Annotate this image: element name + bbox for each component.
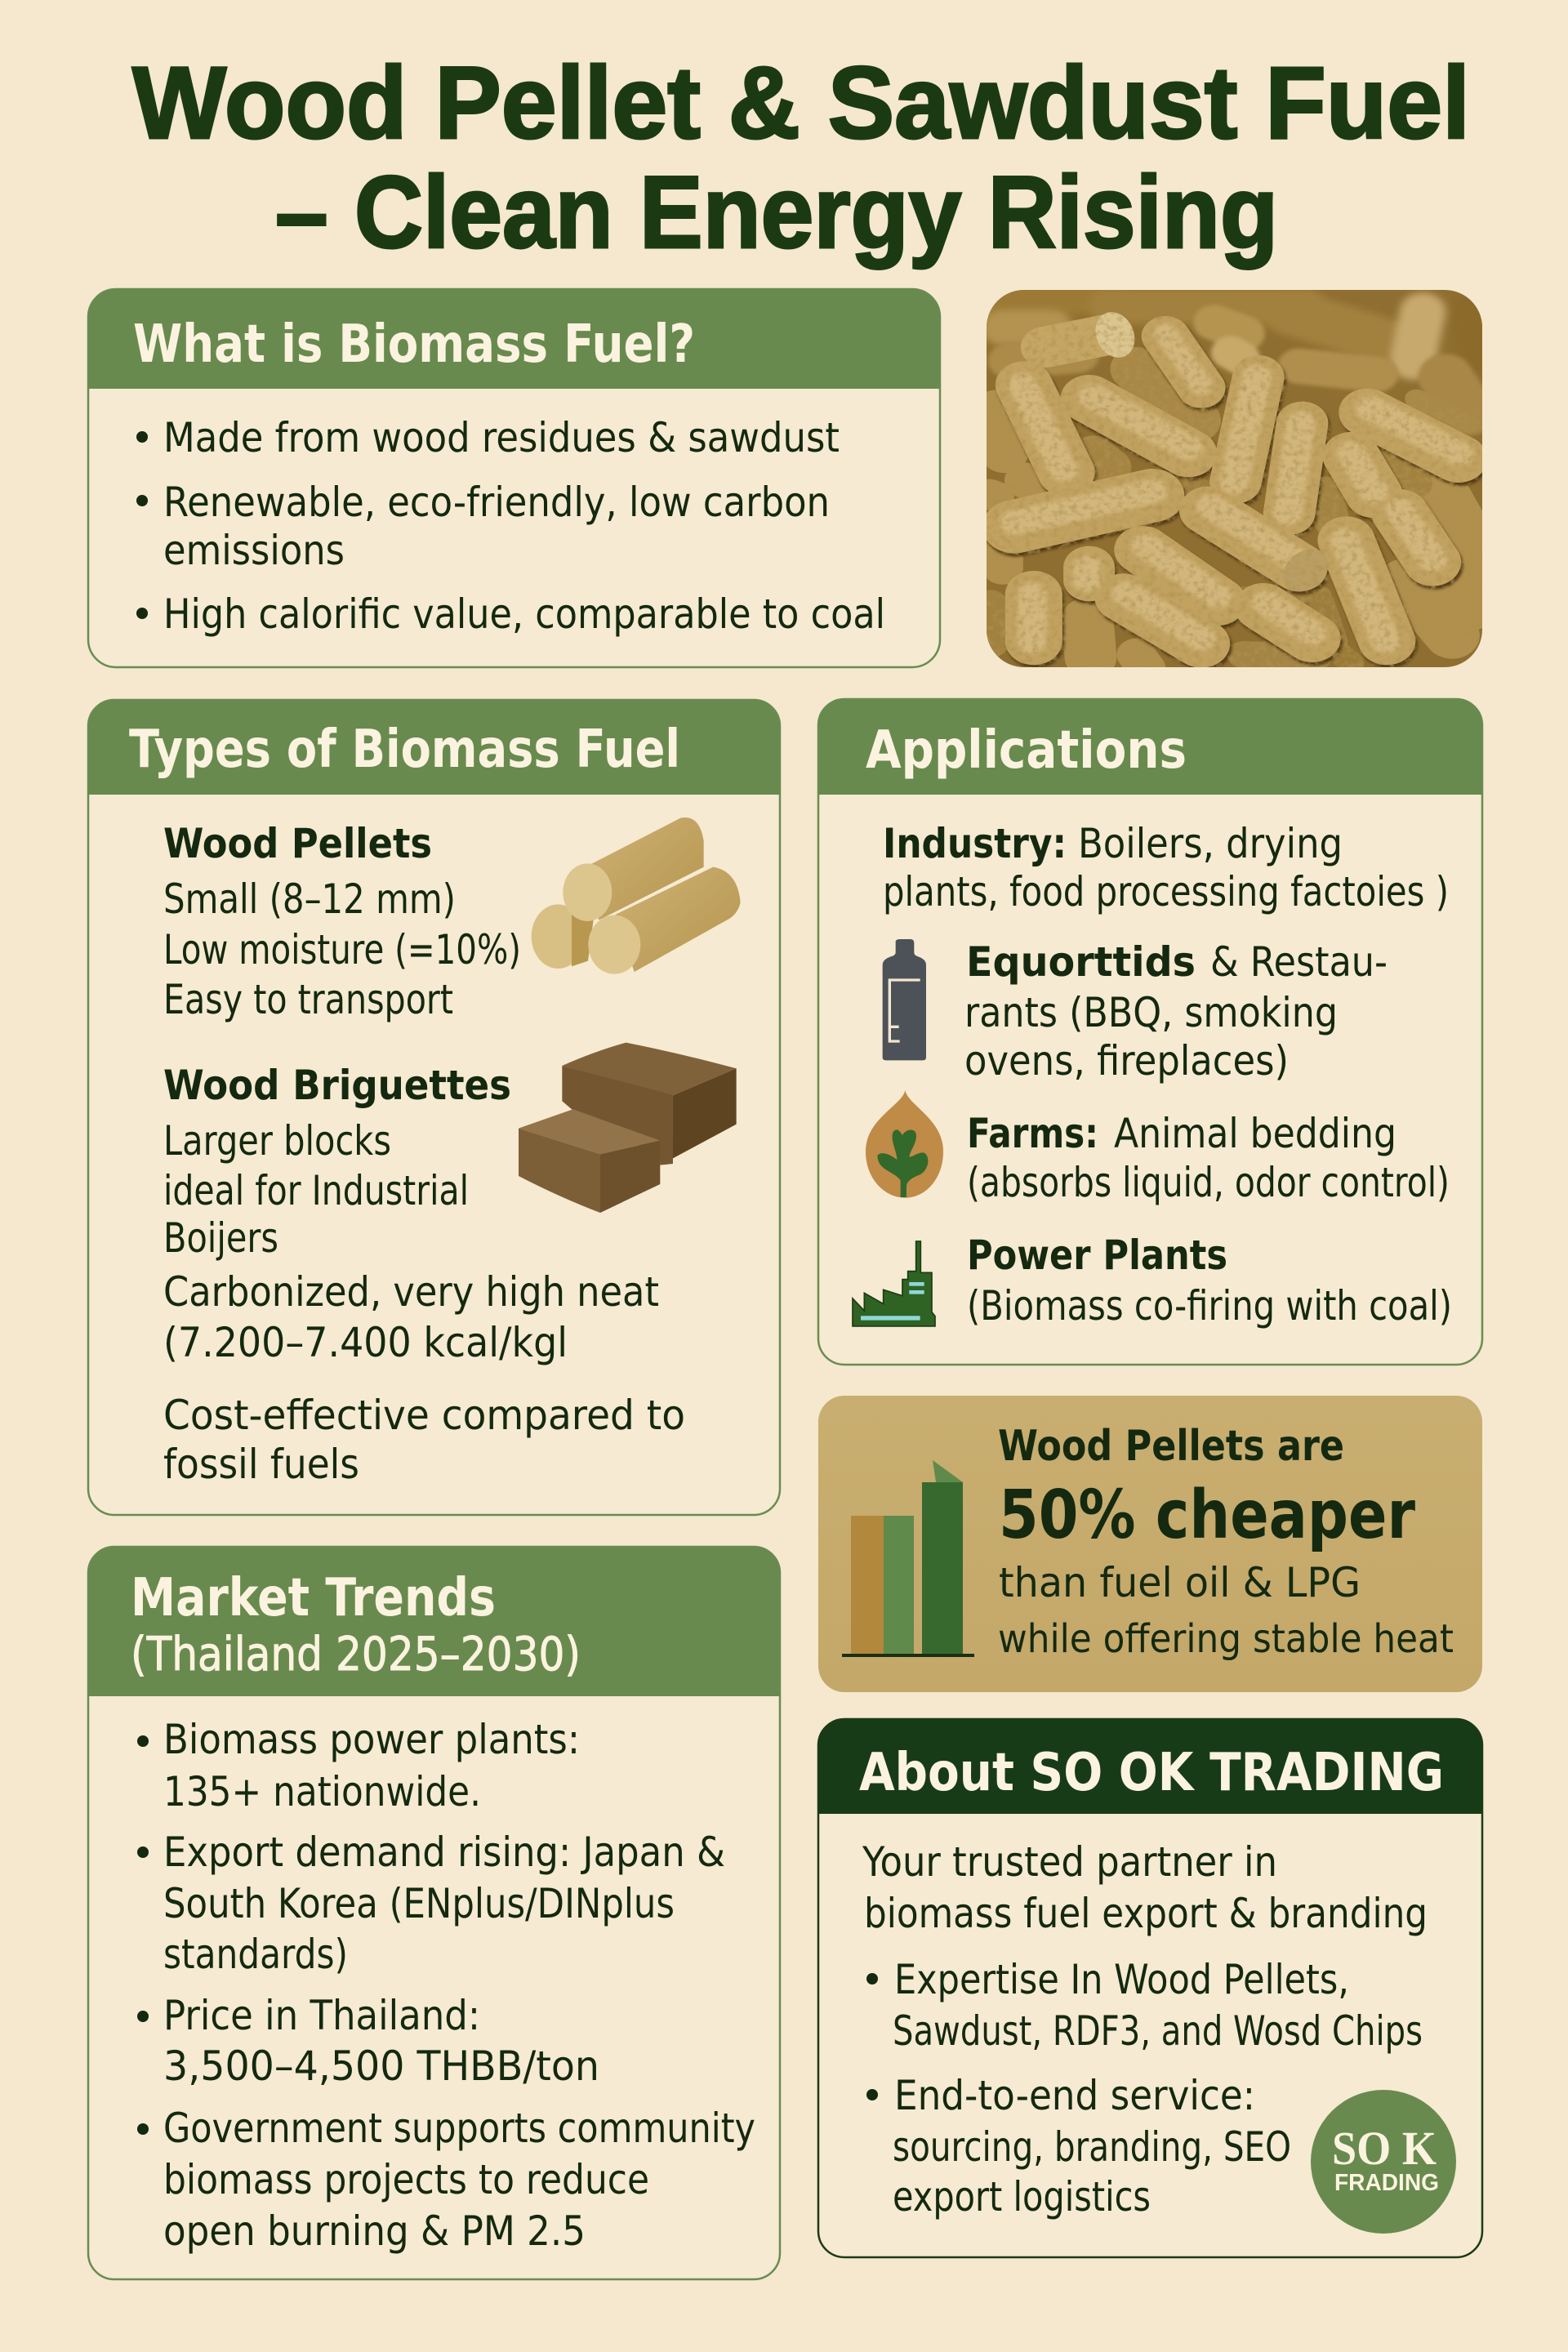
panel: applications — [818, 699, 1482, 1365]
bullet: expertise: Sawdust, RDF3, and Wosd Chips — [893, 2007, 1423, 2055]
text block: wood pellets: Wood Pellets — [163, 820, 432, 867]
application: farms: Animal bedding — [1114, 1110, 1396, 1157]
text block: cost-effective: Cost-effective compared to — [163, 1392, 685, 1439]
bullet: expertise: Expertise In Wood Pellets, — [894, 1956, 1349, 2003]
bullet list: Made from wood residues & sawdust — [163, 414, 840, 461]
panel: about so ok trading — [818, 1719, 1482, 2257]
application: farms: Farms: — [967, 1110, 1098, 1157]
bullet: end-to-end service: End-to-end service: — [894, 2072, 1255, 2119]
callout text: than fuel oil & LPG — [999, 1559, 1361, 1606]
bullet: end-to-end service: export logistics — [893, 2173, 1151, 2221]
callout: 50% cheaper — [818, 1396, 1482, 1692]
icon: power plant — [853, 1241, 935, 1326]
heading: what is biomass fuel: What is Biomass Fuel? — [133, 314, 695, 375]
bullet: government support: Government supports community — [163, 2105, 755, 2152]
heading: market trends: Market Trends — [131, 1568, 496, 1628]
bullet: export demand: Export demand rising: Japan & — [163, 1829, 725, 1876]
text block: wood briquettes — [163, 1062, 659, 1366]
text block: cost-effective: fossil fuels — [163, 1441, 359, 1488]
icon: wood briquettes — [519, 1043, 737, 1213]
heading: about so ok trading: About SO OK TRADING — [859, 1743, 1444, 1803]
panel: types of biomass fuel — [88, 700, 780, 1515]
callout text: 50% cheaper — [999, 1477, 1415, 1554]
logo: so ok trading badge: FRADING — [1334, 2170, 1439, 2196]
text block: wood pellets: Small (8–12 mm) — [163, 875, 456, 923]
icon: stacked wood pellets — [532, 817, 741, 974]
bullet: export demand — [137, 1829, 725, 1978]
title — [132, 47, 1470, 270]
text block: wood briquettes: Carbonized, very high neat — [163, 1268, 659, 1316]
icon: bottle — [883, 939, 926, 1060]
bullet: price — [137, 1992, 599, 2090]
bullet: power plants: 135+ nationwide. — [163, 1768, 481, 1815]
bullet: expertise — [866, 1956, 1423, 2055]
text block: wood briquettes: Boijers — [163, 1214, 278, 1262]
bullet: export demand: South Korea (ENplus/DINplus — [163, 1880, 675, 1927]
text block: wood briquettes: ideal for Industrial — [163, 1167, 469, 1214]
callout text — [998, 1422, 1454, 1662]
callout text: while offering stable heat — [998, 1616, 1454, 1662]
application: equorttids and restaurants — [964, 938, 1388, 1085]
application: power plants: (Biomass co-firing with coal) — [967, 1282, 1452, 1330]
logo: so ok trading badge: SO K — [1332, 2122, 1437, 2175]
bullet: end-to-end service: sourcing, branding, SEO — [893, 2123, 1291, 2171]
text block: wood briquettes: Wood Briguettes — [163, 1062, 511, 1109]
bullet list: High calorific value, comparable to coal — [163, 590, 885, 638]
application: industry: Industry: — [883, 820, 1067, 867]
bullet list: Renewable, eco-friendly, low carbon — [163, 479, 830, 526]
heading: market trends: (Thailand 2025–2030) — [131, 1628, 581, 1682]
text block: intro: biomass fuel export & branding — [864, 1890, 1428, 1937]
application: equorttids and restaurants: rants (BBQ, smoking — [964, 989, 1338, 1036]
text block: intro — [862, 1838, 1428, 1937]
bullet: price: Price in Thailand: — [163, 1992, 480, 2039]
application: farms — [967, 1110, 1450, 1206]
bullet: price: 3,500–4,500 THBB/ton — [163, 2042, 599, 2090]
bullet: end-to-end service — [866, 2072, 1291, 2221]
callout text: Wood Pellets are — [998, 1422, 1344, 1471]
text block: wood briquettes: Larger blocks — [163, 1117, 391, 1165]
photo: wood pellets — [980, 290, 1482, 668]
bullet: government support — [137, 2105, 755, 2255]
application: power plants — [967, 1232, 1452, 1330]
text block: wood pellets — [163, 820, 521, 1023]
application: equorttids and restaurants: ovens, fireplaces) — [964, 1037, 1289, 1085]
title: – Clean Energy Rising — [275, 156, 1278, 270]
icon: leaf drop — [866, 1090, 943, 1198]
heading: types of biomass fuel: Types of Biomass Fuel — [129, 719, 680, 780]
application: industry — [883, 820, 1449, 915]
bullet: government support: open burning & PM 2.5 — [163, 2207, 586, 2255]
heading: market trends — [131, 1568, 581, 1682]
text block: wood pellets: Easy to transport — [163, 976, 453, 1023]
title: Wood Pellet & Sawdust Fuel — [132, 47, 1470, 160]
bullet: power plants — [137, 1716, 580, 1815]
heading: applications: Applications — [866, 720, 1187, 781]
application: industry: plants, food processing factoies ) — [883, 868, 1449, 915]
application: farms: (absorbs liquid, odor control) — [967, 1159, 1450, 1206]
application: power plants: Power Plants — [967, 1232, 1227, 1279]
bullet: government support: biomass projects to reduce — [163, 2156, 649, 2203]
text block: cost-effective — [163, 1392, 685, 1488]
text block: intro: Your trusted partner in — [862, 1838, 1277, 1886]
application: equorttids and restaurants: Equorttids — [966, 938, 1196, 986]
application: equorttids and restaurants: & Restau- — [1210, 938, 1388, 986]
bullet list — [136, 414, 885, 638]
panel: market trends — [88, 1547, 780, 2279]
text block: wood pellets: Low moisture (=10%) — [163, 926, 521, 973]
bullet list: emissions — [163, 527, 345, 574]
panel: what is biomass fuel — [88, 289, 940, 667]
bar chart: price comparison — [842, 1460, 974, 1657]
application: industry: Boilers, drying — [1078, 820, 1343, 867]
bullet: power plants: Biomass power plants: — [163, 1716, 580, 1763]
bullet: export demand: standards) — [163, 1931, 348, 1978]
text block: wood briquettes: (7.200–7.400 kcal/kgl — [163, 1319, 568, 1366]
logo: so ok trading badge — [1311, 2090, 1456, 2234]
